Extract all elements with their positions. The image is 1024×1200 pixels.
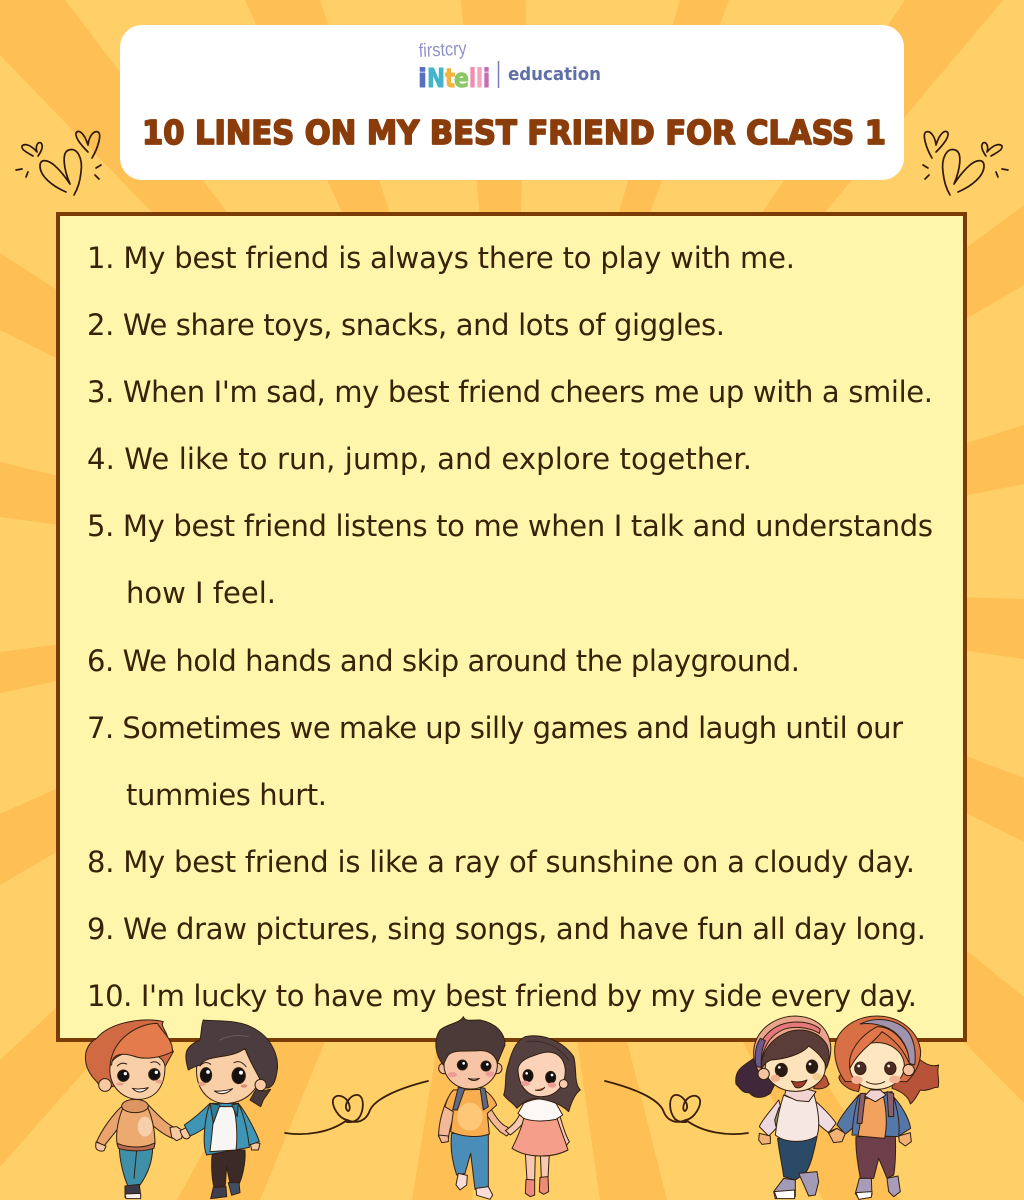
illustration: girl with pink sweater: [736, 1016, 842, 1199]
logo: i: [418, 64, 427, 94]
logo: [418, 38, 601, 94]
line 7 continued: tummies hurt.: [126, 778, 327, 812]
line 7: 7. Sometimes we make up silly games and laugh until our: [87, 711, 903, 745]
illustration: girl with pink skirt: [504, 1036, 580, 1197]
line 6: 6. We hold hands and skip around the playground.: [87, 644, 800, 678]
illustration: girl with blue jacket: [829, 1016, 939, 1199]
logo: l: [469, 64, 476, 94]
line 8: 8. My best friend is like a ray of sunshine on a cloudy day.: [87, 845, 915, 879]
logo: N: [427, 64, 445, 94]
icon: hearts left: [16, 131, 101, 195]
icon: hearts right: [923, 131, 1008, 195]
logo: t: [445, 64, 455, 94]
icon: heart connector left: [285, 1081, 428, 1134]
illustration: boy with red hair: [85, 1020, 183, 1199]
logo: e: [454, 64, 469, 94]
line 9: 9. We draw pictures, sing songs, and have fun all day long.: [87, 912, 926, 946]
illustration: boy with orange shirt: [436, 1017, 512, 1199]
logo: firstcry: [418, 38, 468, 62]
line 4: 4. We like to run, jump, and explore together.: [87, 442, 752, 476]
line 10: 10. I'm lucky to have my best friend by my side every day.: [87, 979, 917, 1013]
logo: l: [476, 64, 483, 94]
line 1: 1. My best friend is always there to play with me.: [87, 241, 795, 275]
line 5 continued: how I feel.: [126, 576, 276, 610]
line 5: 5. My best friend listens to me when I talk and understands: [87, 509, 933, 543]
panel: ten lines list: [58, 214, 965, 1040]
icon: heart connector right: [605, 1081, 748, 1134]
logo: education: [508, 64, 601, 85]
header card: [120, 25, 904, 180]
line 3: 3. When I'm sad, my best friend cheers me up with a smile.: [87, 375, 933, 409]
title: 10 LINES ON MY BEST FRIEND FOR CLASS 1: [142, 113, 886, 152]
illustration: boy with blue jacket: [180, 1020, 277, 1199]
logo: i: [483, 64, 490, 94]
line 2: 2. We share toys, snacks, and lots of giggles.: [87, 308, 725, 342]
